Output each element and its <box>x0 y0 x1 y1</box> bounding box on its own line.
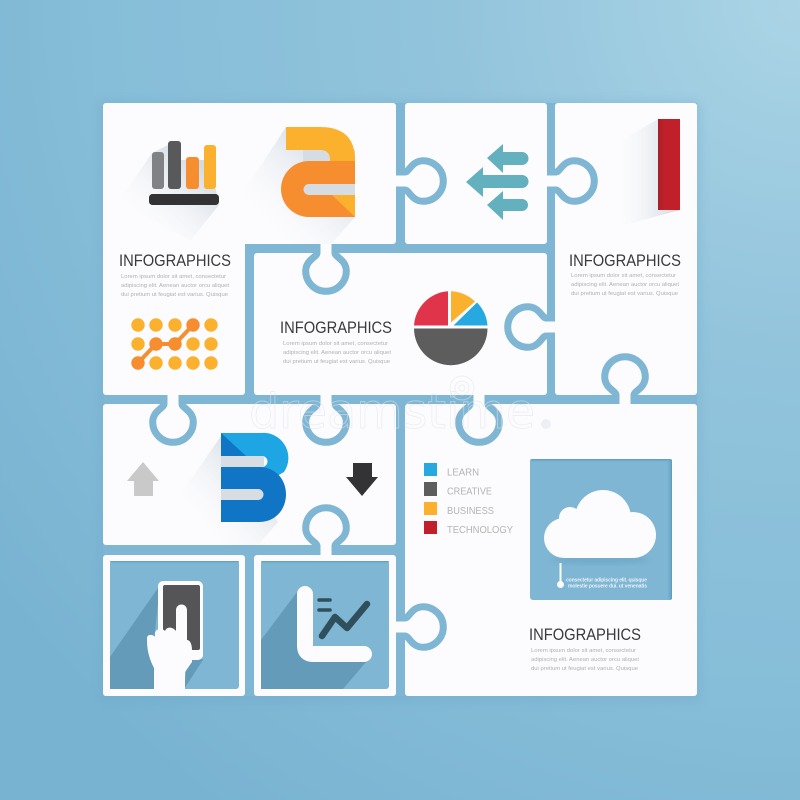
connector: cloud to red bar <box>605 357 645 404</box>
icon: cloud <box>544 490 656 558</box>
connector: top-left to arrows <box>396 161 443 201</box>
connector: arrows to red bar <box>547 161 594 201</box>
puzzle connectors <box>153 161 645 647</box>
text block: red panel: Lorem ipsum dolor sit amet, consectetur <box>571 273 676 279</box>
connector: centre to B <box>306 395 346 442</box>
text block: cloud panel: dui pretium ut feugiat est varius. Quisque <box>531 666 638 672</box>
legend <box>424 463 513 536</box>
connector: chart to B <box>306 508 346 555</box>
icon: numeral 2 <box>240 127 355 244</box>
text block: top-left: dui pretium ut feugiat est varius. Quisque <box>121 292 228 298</box>
panel: arrows <box>405 103 547 244</box>
legend item: learn: LEARN <box>447 466 479 478</box>
text block: centre: dui pretium ut feugiat est varius. Quisque <box>283 359 390 365</box>
heading: red panel: INFOGRAPHICS <box>569 251 681 270</box>
soft shadow behind puzzle <box>99 101 701 703</box>
icon: three left arrows <box>466 144 528 220</box>
panel: letter B <box>103 404 396 545</box>
text block: cloud caption: molestie posuere dui. ut venenatis <box>568 584 647 590</box>
puzzle gap lines <box>103 103 697 696</box>
connector: chart to cloud <box>396 607 443 647</box>
heading: cloud panel: INFOGRAPHICS <box>529 625 641 644</box>
panel: centre pie <box>254 253 547 395</box>
icon: dot grid line chart <box>131 318 218 370</box>
panel: hand frame <box>103 555 245 696</box>
watermark: dreamstime <box>249 384 535 440</box>
heading: centre: INFOGRAPHICS <box>280 318 392 337</box>
icon: pin <box>557 563 564 588</box>
text block: red panel: dui pretium ut feugiat est varius. Quisque <box>571 291 678 297</box>
legend item: technology: TECHNOLOGY <box>447 524 513 536</box>
text block: cloud panel: adipiscing elit. Aenean auctor orcu aliquet <box>531 657 639 663</box>
cloud window <box>530 459 672 600</box>
text block: centre: adipiscing elit. Aenean auctor orcu aliquet <box>283 350 391 356</box>
text block: top-left: adipiscing elit. Aenean auctor orcu aliquet <box>121 283 229 289</box>
text block: cloud panel: Lorem ipsum dolor sit amet, consectetur <box>531 648 636 654</box>
text block: centre: Lorem ipsum dolor sit amet, consectetur <box>283 341 388 347</box>
icon: down arrow <box>346 463 378 496</box>
icon: growth chart frame <box>261 561 389 689</box>
legend item: creative: CREATIVE <box>447 486 492 498</box>
icon: up arrow <box>127 462 159 496</box>
panel: large cloud <box>405 404 697 696</box>
text block: top-left: Lorem ipsum dolor sit amet, consectetur <box>121 274 226 280</box>
icon: red bar <box>613 119 680 227</box>
text block: cloud caption: consectetur adipiscing elit. quisque <box>566 578 647 584</box>
connector: top-left to centre <box>306 244 346 291</box>
icon: letter B <box>180 433 288 545</box>
text block: red panel: adipiscing elit. Aenean auctor orcu aliquet <box>571 282 679 288</box>
heading: top-left: INFOGRAPHICS <box>119 251 231 270</box>
icon: hand on phone <box>110 561 239 689</box>
panel: red bar <box>555 103 697 395</box>
connector: top-left to B <box>153 395 193 442</box>
panel: top-left L piece <box>103 103 396 395</box>
pie chart <box>414 291 488 365</box>
connector: centre to cloud <box>459 395 499 442</box>
panel: chart frame <box>254 555 396 696</box>
connector: red bar to centre <box>508 307 555 347</box>
legend item: business: BUSINESS <box>447 505 494 517</box>
icon: bar chart <box>120 141 219 241</box>
